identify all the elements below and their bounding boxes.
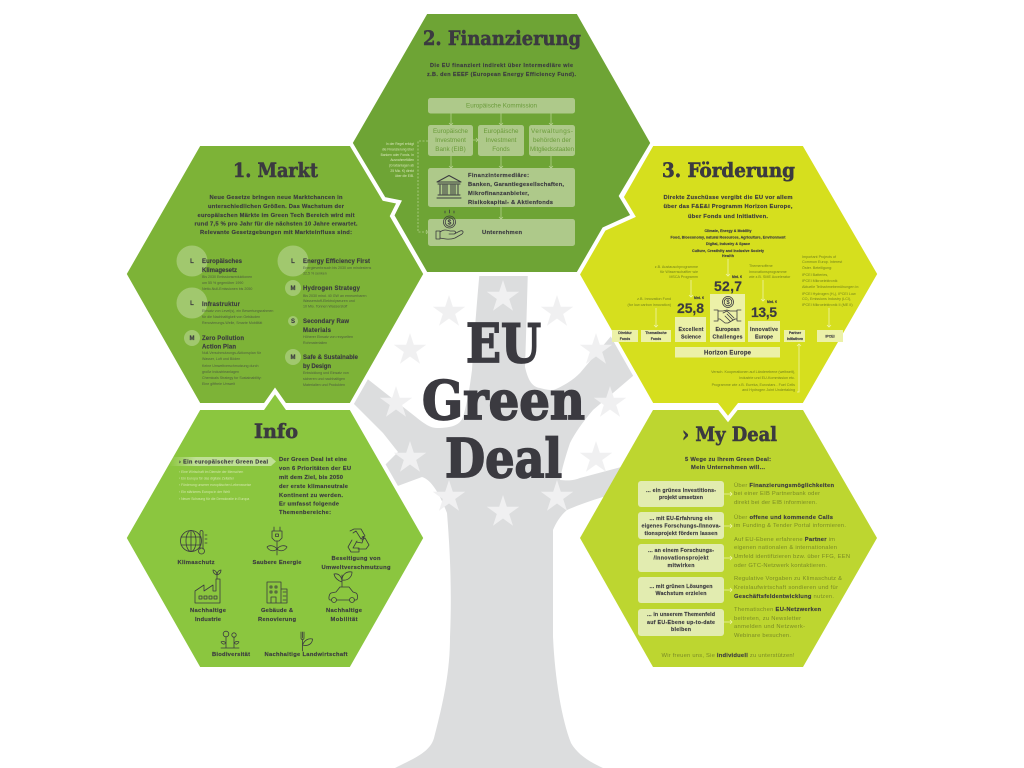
heading: My Deal: › My Deal (682, 423, 777, 446)
left legislation list: Einsatz von Level(s), ein Bewertungsrahmen (202, 309, 273, 313)
programme notes (628, 255, 859, 392)
programme notes: IPCEI Mikroelektronik II (ME II) (802, 303, 853, 307)
right legislation list: by Design (303, 364, 331, 370)
topic labels: Biodiversität (212, 652, 250, 658)
heading: Markt: 1. Markt (233, 159, 318, 182)
box labels: IPCEI (825, 334, 835, 338)
box labels: Science (681, 334, 701, 340)
flow box labels: Investment (435, 137, 466, 144)
action text (734, 482, 850, 639)
action text: Regulative Vorgaben zu Klimaschutz & (734, 576, 842, 582)
budget figures (677, 275, 777, 320)
action text: im Funding & Tender Portal informieren. (734, 523, 846, 529)
intro text (194, 195, 358, 236)
impact letters: L (190, 301, 194, 307)
hexagon: Förderung with pointer (578, 144, 880, 419)
impact letters: M (190, 336, 194, 342)
topic labels (178, 556, 391, 658)
goal box labels: ... ein grünes Investitions- (646, 488, 716, 494)
action text: bei einer EIB Partnerbank oder (734, 491, 820, 497)
title: EU Green Deal (422, 313, 585, 490)
budget figures: Mrd. € (694, 296, 704, 300)
right legislation list: Energieverbrauch bis 2030 um mindestens (303, 266, 372, 270)
box labels: Thematische (645, 331, 667, 335)
programme notes: Programme wie z.B. Eureka, Eurostars - Fuel Cells (712, 383, 795, 387)
heading: Info: Info (254, 420, 298, 443)
left legislation list: Keine Umweltverschmutzung durch (202, 364, 259, 368)
right legislation list: Höherer Einsatz von recycelten (303, 335, 353, 339)
left legislation list: Infrastruktur (202, 302, 241, 308)
programme notes: Versch. Kooperationen auf Länderebene (weltweit), (711, 370, 795, 374)
clusters list: Health (722, 254, 734, 258)
action text: Webinare besuchen. (734, 633, 791, 639)
icon: flowers (221, 631, 239, 648)
intro text: Neue Gesetze bringen neue Marktchancen in (210, 195, 343, 201)
banner: Ein europäischer Green Deal (169, 457, 276, 466)
goal boxes (638, 481, 724, 636)
programme notes: and Hydrogen Joint Undertaking (742, 388, 795, 392)
left legislation list: Netto-Null-Emissionen bis 2050 (202, 287, 252, 291)
topic labels: Umweltverschmutzung (322, 565, 391, 571)
left legislation list: Klimagesetz (202, 268, 237, 274)
side note: 25 Mio. €) direkt (390, 169, 414, 173)
priorities list: › Ein stärkeres Europa in der Welt (179, 490, 230, 494)
box labels: Initiativen (787, 337, 803, 341)
title: EU Green Deal: EU (466, 313, 541, 375)
right legislation list: sicheren und nachhaltigen (303, 377, 345, 381)
right legislation list: 32,5 % senken (303, 272, 327, 276)
impact circles (176, 246, 308, 365)
topic labels: Nachhaltige (326, 608, 363, 614)
intro text: rund 7,5 % pro Jahr für die nächsten 10 Jahre erwartet. (194, 222, 358, 228)
heading: Förderung: 3. Förderung (662, 159, 795, 182)
impact letters: L (291, 259, 295, 265)
side note: über die EIB. (395, 174, 414, 178)
side note: In der Regel erfolgt (386, 142, 414, 146)
tree silhouette (352, 268, 640, 768)
right legislation list: 10 Mio. Tonnen Wasserstoff (303, 304, 347, 308)
programme notes: Common Europ. Interest (802, 260, 842, 264)
topic labels: Nachhaltige (190, 608, 227, 614)
box labels: Fonds (620, 337, 630, 341)
intro text: über Fonds und Initiativen. (688, 214, 768, 220)
programme notes: Innovationsprogramme (749, 270, 787, 274)
hexagon: Info with pointer (124, 391, 426, 669)
left legislation list: Renovierungs-Welle, Smarte Mobilität (202, 321, 262, 325)
flow box labels: Finanzintermediäre: (468, 173, 529, 179)
intro text: unterschiedlichen Größen. Das Wachstum der (208, 204, 345, 210)
budget boxes (612, 294, 843, 358)
heading: Finanzierung: 2. Finanzierung (423, 27, 581, 50)
panel: Markt (124, 144, 426, 405)
EU stars circle (380, 280, 626, 526)
box labels: Horizon Europe (704, 350, 752, 356)
right legislation list: Materials (303, 328, 332, 334)
left legislation list: Eine giftfreie Umwelt (202, 382, 235, 386)
programme notes: Industrie und EU-Kommission etc. (739, 376, 795, 380)
icon: hand with coin (436, 210, 463, 239)
box labels: European (716, 327, 740, 333)
flow box labels: Mikrofinanzanbieter, (468, 191, 529, 197)
side note (381, 142, 415, 178)
goal box labels: eigenes Forschungs-/Innova- (642, 524, 721, 530)
budget figures: Mrd. € (732, 275, 742, 279)
priorities list: › Ein Europa für das digitale Zeitalter (179, 476, 235, 480)
programme notes: für Wissenschaftler wie (660, 270, 698, 274)
impact letters: M (290, 286, 296, 292)
icon: plug plant (267, 527, 287, 555)
intro text (685, 457, 771, 471)
intro text: Mein Unternehmen will... (691, 465, 765, 471)
priorities list: › Eine Wirtschaft im Dienste der Menschen (179, 470, 243, 474)
arrows (654, 259, 831, 392)
budget figures: 52,7 (714, 278, 742, 294)
impact letters: S (291, 319, 295, 325)
flow box labels: Verwaltungs- (531, 128, 573, 135)
goal box labels: tionsprojekt fördern lassen (644, 531, 718, 537)
right legislation list: Rohmaterialien (303, 341, 327, 345)
description text: mit dem Ziel, bis 2050 (279, 475, 343, 481)
intro text (427, 63, 576, 78)
goal box labels: auf EU-Ebene up-to-date (647, 620, 715, 626)
left legislation list: um 55 % gegenüber 1990 (202, 281, 243, 285)
flow boxes (428, 98, 575, 246)
intro text: über das F&E&I Programm Horizon Europe, (664, 204, 793, 210)
action text: anmelden und Netzwerk- (734, 624, 805, 630)
dashed direct arrow (418, 141, 428, 234)
priorities list: › Förderung unserer europäischen Lebensweise (179, 483, 251, 487)
flow box labels: Mitgliedsstaaten (530, 146, 574, 153)
intro text: Direkte Zuschüsse vergibt die EU vor allem (664, 195, 792, 201)
action text: Thematischen EU-Netzwerken (734, 607, 821, 613)
title: EU Green Deal: Green (422, 370, 585, 432)
flow box labels: Europäische (433, 128, 468, 135)
flow box labels: Risikokapital- & Aktienfonds (468, 200, 553, 206)
flow box labels: behörden der (533, 137, 571, 144)
icon: handshake and coin (714, 296, 741, 323)
clusters list: Culture, Creativity and Inclusive Society (692, 249, 764, 253)
box labels (618, 327, 835, 356)
action text: direkt bei der EIB informieren. (734, 500, 817, 506)
programme notes: Aktuelle Teilnahmebemühungen in: (802, 285, 859, 289)
icon: recycling (348, 529, 369, 552)
closing line: Wir freuen uns, Sie individuell zu unterstützen! (662, 653, 795, 659)
side note: (Großanlagen ab (389, 164, 414, 168)
priorities list: › Neuer Schwung für die Demokratie in Europa (179, 497, 249, 501)
box labels: Excellent (678, 327, 704, 333)
left legislation list: Bis 2030 Emissionsreduktionen (202, 275, 252, 279)
programme notes: IPCEI Mikroelektronik (802, 279, 838, 283)
goal box labels: ... mit EU-Erfahrung ein (650, 516, 712, 522)
box labels: Fonds (651, 337, 661, 341)
right legislation list: Energy Efficiency First (303, 259, 370, 265)
right legislation list: Hydrogen Strategy (303, 286, 361, 292)
side note: die Finanzierung über (382, 148, 415, 152)
icon: car with plant (329, 572, 358, 602)
action text: Geschäftsfeldentwicklung nutzen. (734, 594, 834, 600)
left legislation list: Europäisches (202, 259, 243, 265)
flow box labels: Bank (EIB) (435, 146, 466, 153)
intro text: Relevante Gesetzgebungen mit Markteinfluss sind: (200, 230, 352, 236)
description text: von 6 Prioritäten der EU (279, 466, 351, 472)
arrows to actions (724, 492, 732, 624)
left legislation list: Null-Verschmutzungs-Aktionsplan für (202, 351, 262, 355)
programme notes: wie z.B. SME Accelerator (749, 275, 791, 279)
icon: building (267, 582, 287, 603)
clusters list (670, 229, 786, 258)
intro text: Die EU finanziert indirekt über Intermediäre wie (430, 63, 573, 69)
panel: My Deal (580, 410, 877, 667)
goal box labels: mitwirken (668, 563, 694, 569)
action text: Über Finanzierungsmöglichkeiten (734, 482, 834, 489)
right legislation list: Safe & Sustainable (303, 355, 359, 361)
flow box labels: Fonds (492, 146, 510, 153)
action text: eigenen nationalen & internationalen (734, 545, 837, 551)
left legislation list: für die Nachhaltigkeit von Gebäuden (202, 315, 260, 319)
left legislation list (202, 259, 273, 386)
action text: Kreislaufwirtschaft sondieren und für (734, 585, 838, 591)
description text: Themenbereiche: (279, 510, 331, 516)
action text: oder GTC-Netzwerk kontaktieren. (734, 563, 827, 569)
programme notes: CO₂ Emissions Industry (LCI), (802, 297, 851, 301)
impact letters (190, 259, 296, 361)
impact letters: M (290, 355, 296, 361)
priorities list (179, 470, 251, 501)
programme notes: Themenoffene (749, 264, 773, 268)
box labels: Europe (755, 334, 773, 340)
budget figures: Mrd. € (767, 300, 777, 304)
hexagon: My Deal (580, 410, 877, 667)
action text: Auf EU-Ebene erfahrene Partner im (734, 537, 835, 543)
programme notes: Öster. Beteiligung: (802, 266, 832, 270)
topic labels: Renovierung (258, 617, 296, 623)
clusters list: Food, Bioeconomy, natural Resources, Agriculture, Environment (670, 236, 786, 240)
icon: handshake and coin: $ (726, 300, 730, 306)
left legislation list: Chemicals Strategy for Sustainability: (202, 376, 262, 380)
programme notes: Important Projects of (802, 255, 837, 259)
clusters list: Climate, Energy & Mobility (704, 229, 752, 233)
icon: globe thermometer (180, 530, 207, 554)
description text: Kontinent zu werden. (279, 493, 343, 499)
hexagon: Finanzierung with pointer (350, 12, 652, 274)
icon: hand with coin: $ (448, 220, 452, 226)
topic labels: Klimaschutz (178, 560, 215, 566)
intro text: z.B. den EEEF (European Energy Efficiency Fund). (427, 72, 576, 78)
budget figures: 13,5 (751, 304, 777, 320)
box labels: Challenges (712, 334, 743, 340)
programme notes: IPCEI Hydrogen (H₂), IPCEI Low (802, 292, 856, 296)
goal box labels: Wachstum erzielen (656, 591, 706, 597)
intro text (664, 195, 793, 220)
budget figures: 25,8 (677, 300, 704, 316)
goal box labels (642, 488, 721, 633)
right legislation list: Materialien und Produkten (303, 383, 345, 387)
right legislation list: Wasserstoff-Elektrolyseuren und (303, 299, 355, 303)
right legislation list: Entwicklung und Einsatz von (303, 371, 349, 375)
goal box labels: ... an einem Forschungs- (648, 548, 714, 554)
goal box labels: bleiben (671, 627, 691, 633)
description text (279, 457, 351, 516)
flow arrows (449, 114, 553, 219)
box labels: Direktur (618, 331, 632, 335)
flow box labels: Europäische (483, 128, 519, 135)
hexagon: Markt with pointer (124, 144, 426, 405)
programme notes: z.B. Innovation Fund (637, 297, 671, 301)
left legislation list: Zero Pollution (202, 336, 244, 342)
flow box labels: Unternehmen (482, 230, 522, 236)
flow box labels: Investment (486, 137, 517, 144)
panel: Förderung (578, 144, 880, 419)
flow box labels: Banken, Garantiegesellschaften, (468, 182, 564, 188)
icon: bank (437, 176, 461, 198)
clusters list: Digital, Industry & Space (706, 242, 750, 246)
programme notes: (for low carbon innovation) (628, 303, 671, 307)
left legislation list: Wasser, Luft und Böden (202, 357, 240, 361)
action text: Umfeld identifizieren bzw. über FFG, EEN (734, 554, 850, 560)
programme notes: IPCEI Batteries, (802, 273, 828, 277)
flow box labels: Europäische Kommission (466, 102, 537, 110)
box labels: Innovative (750, 327, 778, 333)
impact letters: L (190, 259, 194, 265)
programme notes: z.B. Austauschprogramme (655, 265, 698, 269)
goal box labels: /Innovationsprojekt (654, 556, 709, 562)
box labels: Partner (789, 331, 802, 335)
action text: beitreten, zu Newsletter (734, 616, 801, 622)
panel: Finanzierung (350, 12, 652, 274)
left legislation list: große Industrieanlagen (202, 370, 239, 374)
description text: der erste klimaneutrale (279, 484, 349, 490)
right legislation list: Secondary Raw (303, 319, 349, 325)
programme notes: MSCA Programm (669, 275, 698, 279)
banner: Ein europäischer Green Deal: › Ein europäischer Green Deal (179, 460, 268, 466)
flow box labels (433, 102, 574, 236)
goal box labels: ... mit grünen Lösungen (650, 584, 712, 590)
left legislation list: Action Plan (202, 344, 236, 350)
description text: Er umfasst folgende (279, 502, 340, 508)
icon: fork with plant (301, 632, 312, 651)
icon: factory (195, 570, 221, 603)
topic labels: Beseitigung von (332, 556, 381, 562)
panel: Info (124, 391, 426, 669)
topic labels: Industrie (195, 617, 222, 623)
title: EU Green Deal: Deal (445, 428, 562, 490)
intro text: 5 Wege zu Ihrem Green Deal: (685, 457, 771, 463)
topic labels: Saubere Energie (252, 560, 302, 566)
goal box labels: projekt umsetzen (659, 495, 703, 501)
description text: Der Green Deal ist eine (279, 457, 348, 463)
topic labels: Mobilität (330, 617, 358, 623)
intro text: europäischen Märkte im Green Tech Bereich wird mit (198, 213, 355, 219)
side note: Banken oder Fonds. In (381, 153, 414, 157)
action text: Über offene und kommende Calls (734, 514, 833, 521)
goal box labels: ... in unserem Themenfeld (647, 612, 715, 618)
side note: Ausnahmefällen (390, 158, 414, 162)
topic labels: Nachhaltige Landwirtschaft (264, 652, 348, 658)
right legislation list: Bis 2030 mind. 40 GW an erneuerbaren (303, 294, 367, 298)
topic labels: Gebäude & (261, 608, 293, 614)
right legislation list (303, 259, 372, 387)
